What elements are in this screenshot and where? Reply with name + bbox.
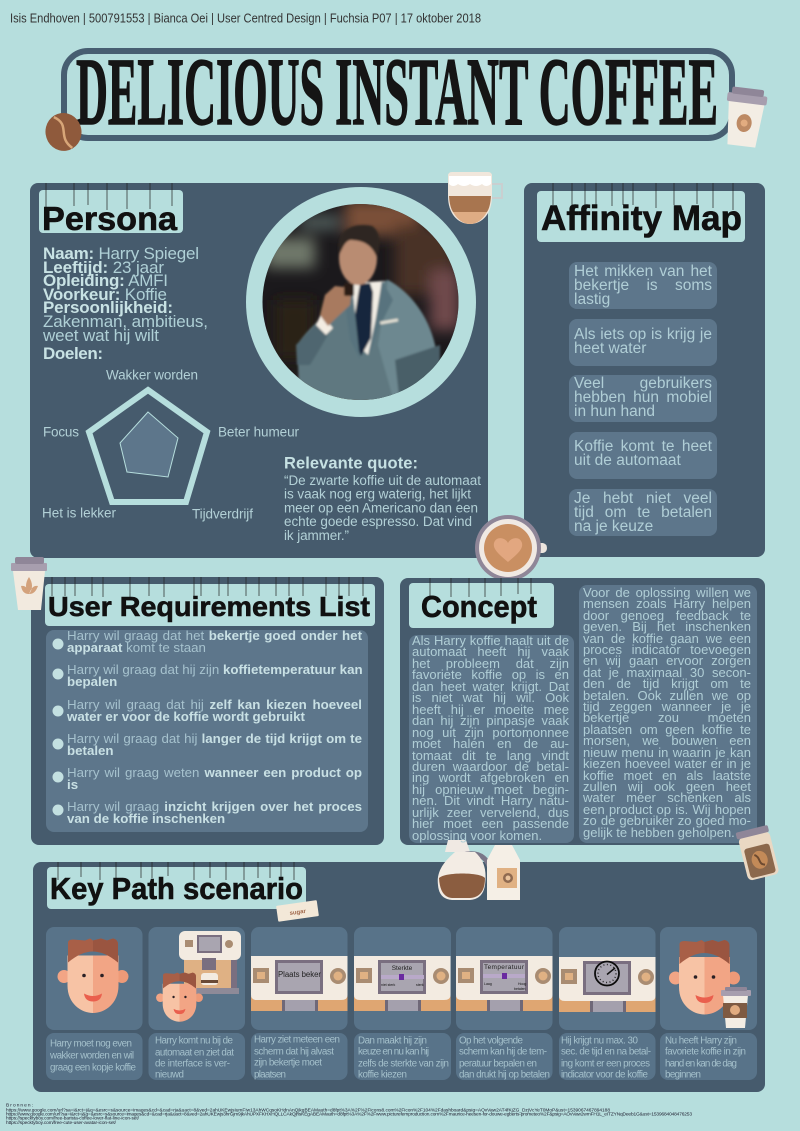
requirement 5: Harry wil graag weten wanneer een product op <box>67 765 362 780</box>
concept text right: den de tijd krijgt om te <box>583 676 751 691</box>
affinity note 4 text: Koffie komt te heet <box>574 438 712 455</box>
concept text right: door genoeg feedback te <box>583 608 751 623</box>
concept text right: een product op is. Wij hopen <box>583 802 751 817</box>
step captions: Harry moet nog even <box>50 1038 132 1050</box>
affinity note 5 text: tijd om te betalen <box>574 504 712 521</box>
concept text left: hier moet een passende <box>412 816 569 831</box>
step 7: harry face with cup <box>669 940 751 1028</box>
concept text right: Voor de oplossing willen we <box>583 585 751 600</box>
step captions: automaat en ziet dat <box>155 1048 234 1058</box>
panel: concept <box>400 578 765 845</box>
affinity note 5 text: Je hebt niet veel <box>574 490 712 507</box>
step captions: zelfs de sterkte van zijn <box>358 1058 449 1070</box>
requirement 3: water er voor de koffie wordt gebruikt <box>67 709 305 724</box>
requirements box <box>46 630 368 832</box>
requirements heading <box>45 577 375 626</box>
concept text right: van de koffie gaan we een <box>583 631 751 646</box>
panel: persona <box>30 183 488 558</box>
persona heading <box>39 183 183 237</box>
step captions: beginnen <box>665 1070 701 1080</box>
affinity note 4 text: uit de automaat <box>574 452 681 469</box>
concept text left: nog uit zijn portomonnee <box>412 725 569 740</box>
concept text left: duren waardoor de betal- <box>412 759 569 774</box>
concept text left: moet halen en de au- <box>412 736 569 751</box>
persona photo <box>246 187 476 417</box>
step captions: hand en kan de dag <box>665 1058 737 1070</box>
concept text left: Als Harry koffie haalt uit de <box>412 633 569 648</box>
concept text left <box>412 633 569 843</box>
radar chart: doelen: Focus <box>43 424 79 440</box>
persona details: Naam: Harry Spiegel <box>43 244 199 263</box>
step captions: wakker worden en wil <box>49 1050 134 1062</box>
step captions <box>49 1034 746 1080</box>
concept text left: het probleem dat zijn <box>412 656 569 671</box>
step captions: Dan maakt hij zijn <box>358 1036 427 1046</box>
requirement 4: betalen <box>67 743 114 758</box>
relevante quote: meer op een Americano dan een <box>284 500 478 516</box>
step captions: sec. de tijd en na betal- <box>561 1046 651 1058</box>
affinity note 3 text: in hun hand <box>574 403 655 420</box>
step captions: ing komt er een proces <box>561 1058 650 1070</box>
sources <box>6 1102 692 1126</box>
affinity notes <box>569 262 717 536</box>
affinity note 2 text: heet water <box>574 340 646 357</box>
requirement 1: Harry wil graag dat het bekertje goed onder het <box>67 628 362 643</box>
requirement 5: is <box>67 777 78 792</box>
relevante quote: is vaak nog erg waterig, het lijkt <box>284 486 471 502</box>
step captions: zijn bekertje moet <box>254 1058 322 1068</box>
step 4: screen sterkte: sterk <box>416 983 424 987</box>
affinity heading <box>537 183 745 242</box>
concept text left: dan heet water krijgt. Dat <box>412 679 569 694</box>
header credit line: Isis Endhoven | 500791553 | Bianca Oei | User Centred Design | Fuchsia P07 | 17 oktober 2018 <box>10 12 481 26</box>
persona details: Leeftijd: 23 jaar <box>43 258 164 277</box>
step 5: screen temperatuur <box>456 956 552 1011</box>
icon: takeaway cup top right <box>721 86 768 148</box>
concept text right: koffie moet en als laatste <box>583 768 751 782</box>
step captions: koffie kiezen <box>358 1070 407 1080</box>
step captions: indicator voor de koffie <box>561 1070 649 1080</box>
title banner <box>64 38 732 145</box>
concept text right: en wij gaan ervoor zorgen <box>583 653 751 668</box>
step 5: screen temperatuur: betalen <box>514 987 526 991</box>
persona details: Doelen: <box>43 344 103 363</box>
concept text left: automaat heeft hij vaak <box>412 644 569 659</box>
icon: takeaway cup with leaf <box>11 557 47 610</box>
step captions: favoriete koffie in zijn <box>665 1046 746 1058</box>
requirement bullets <box>52 638 64 816</box>
icon: coffee jug <box>438 840 492 900</box>
step 5: screen temperatuur: Temperatuur <box>484 964 525 971</box>
requirement 5 <box>67 765 362 792</box>
concept text right: kiezen hoeveel water er in je <box>583 756 751 771</box>
concept text left: nen. Dit vindt Harry natu- <box>412 793 569 808</box>
affinity note 3 text: hebben hun mobiel <box>574 389 712 406</box>
concept text right: zo de gebruiker zo goed mo- <box>583 813 751 828</box>
requirement 4 <box>67 731 362 758</box>
concept text left: ing wordt afgebroken en <box>412 770 569 785</box>
concept text right: bekertje zou moeten <box>583 710 751 725</box>
requirement 3 <box>67 697 362 724</box>
step captions: Op het volgende <box>459 1036 524 1046</box>
panel: user requirements list <box>31 577 384 845</box>
step 2: coffee machine and harry <box>156 931 241 1022</box>
icon: sugar packet <box>276 900 319 922</box>
persona details <box>42 244 208 363</box>
icon: latte glass <box>448 172 502 224</box>
concept text right: proces indicator toevoegen <box>583 642 751 657</box>
step captions: plaatsen <box>254 1070 286 1080</box>
persona details: Voorkeur: Koffie <box>43 285 167 304</box>
step captions: Harry ziet meteen een <box>254 1034 340 1046</box>
concept text left: heeft hij er moeite mee <box>412 702 569 717</box>
affinity note 1 text <box>574 263 712 308</box>
requirement 6 <box>67 799 362 826</box>
affinity note 1 text: bekertje is soms <box>574 277 712 294</box>
radar chart: doelen: Wakker worden <box>106 368 198 382</box>
sources: https://specktyboy.com/free-barista-coffee-lover-flat-line-icon-set/ <box>6 1116 140 1122</box>
step captions: graag een kopje koffie <box>50 1062 137 1074</box>
affinity note 3 text <box>574 375 712 420</box>
icon: sugar packet: sugar <box>289 909 307 917</box>
panel: key path scenario <box>33 862 765 1092</box>
step image cards <box>46 927 757 1030</box>
step captions: keuze en nu kan hij <box>358 1046 429 1058</box>
step captions: nieuwd <box>155 1070 184 1080</box>
icon: coffee bean <box>43 111 84 153</box>
requirement 2: Harry wil graag dat hij zijn koffietemperatuur kan <box>67 662 363 677</box>
icon: coffee jar <box>735 825 780 881</box>
step 3: screen plaats beker: Plaats beker <box>278 970 321 979</box>
concept text right: morsen, we bouwen een <box>583 733 751 748</box>
radar chart: doelen <box>42 368 300 522</box>
persona details: Zakenman, ambitieus, <box>43 312 208 331</box>
radar chart: doelen: Het is lekker <box>42 506 116 520</box>
concept text right: dat je maximaal 30 secon- <box>583 665 751 680</box>
step 5: screen temperatuur: Hoog <box>518 982 526 986</box>
concept text left: dan hij zijn pinpasje vaak <box>412 713 569 728</box>
step captions: scherm dat hij alvast <box>254 1046 334 1058</box>
step captions: Nu heeft Harry zijn <box>665 1036 737 1046</box>
affinity note 5 text <box>574 490 712 535</box>
affinity note 1 text: lastig <box>574 291 610 308</box>
step 4: screen sterkte <box>354 956 450 1011</box>
step captions: dan drukt hij op betalen <box>459 1070 550 1080</box>
sources: https://www.google.com/url?sa=i&rct=j&q=&esrc=s&source=images&cd=&cad=rja&uact=8&ved=2ahUKEwjs3hrGjm9jkAhUPXFKHXHQLLCAkQjhsKEgABEAMauth=d8fpt%3A%2F%2Fwww.picturefernproduction.com%2Fmaurice-heesen-for-douwe-egberts-prometeo%2F&psig=AOvVaw2wmFH1L_eITZYNqDeeb1G&ust=1539684048476253 <box>6 1112 692 1118</box>
requirement 4: Harry wil graag dat hij langer de tijd krijgt om te <box>67 731 362 746</box>
requirement 1: apparaat komt te staan <box>67 640 206 655</box>
step 3: screen plaats beker <box>251 956 348 1011</box>
affinity note 4 text <box>574 438 712 469</box>
affinity note 2 text <box>574 326 712 357</box>
requirement 2: bepalen <box>67 674 117 689</box>
persona details: Persoonlijkheid: <box>43 298 173 317</box>
concept text right: geven. Bij het inschenken <box>583 619 751 634</box>
relevante quote <box>284 454 481 543</box>
concept text left: is niet wat hij wil. Ook <box>412 690 569 705</box>
requirement 6: van de koffie inschenken <box>67 811 225 826</box>
step 6: screen gauge <box>559 957 656 1012</box>
affinity note 5 text: na je keuze <box>574 518 653 535</box>
step 5: screen temperatuur: Laag <box>484 982 492 986</box>
concept text right: tijd zeggen wanneer je je <box>583 699 751 714</box>
step captions: scherm kan hij de tem- <box>459 1046 547 1058</box>
concept text boxes <box>409 585 757 843</box>
step caption cards <box>46 1033 757 1080</box>
relevante quote: ik jammer.” <box>284 528 349 543</box>
radar chart: doelen: Tijdverdrijf <box>192 506 253 522</box>
requirements heading: User Requirements List <box>48 591 370 622</box>
concept text right <box>583 585 751 840</box>
requirement 1 <box>67 628 362 655</box>
concept heading: Concept <box>421 589 537 624</box>
step captions: de interface is ver- <box>155 1058 230 1070</box>
concept text left: tomaat dit te lang vindt <box>412 748 569 763</box>
sources: https://www.google.com/url?sa=i&rct=j&q=&esrc=s&source=images&cd=&cad=rja&uact=8&ved=2ahUKEwjsIumFIw13AhWCqsoKHdnAnQjkgBEAMauth=d8fpt%3A%2F%2Ficons8.com%2Ficon%2F104%2Fdashboard&psig=AOvVaw2AT4fKjZG_DzjVcYeT0MoP&ust=1539067467894188 <box>6 1108 610 1114</box>
step captions: Harry komt nu bij de <box>155 1036 234 1046</box>
persona heading: Persona <box>42 200 178 237</box>
persona details: Opleiding: AMFI <box>43 271 168 290</box>
relevante quote: “De zwarte koffie uit de automaat <box>284 473 481 488</box>
icon: coffee cup from above <box>475 515 547 581</box>
concept text right: mensen zoals Harry helpen <box>583 596 751 611</box>
requirement 3: Harry wil graag dat hij zelf kan kiezen hoeveel <box>67 697 362 712</box>
sources: https://specktyboy.com/free-cute-user-avatar-icon-set/ <box>6 1120 117 1126</box>
panel: affinity map <box>524 183 765 557</box>
sources: Bronnen: <box>6 1102 33 1108</box>
step 4: screen sterkte: Sterkte <box>392 965 413 972</box>
concept text right: nieuw menu in waarin je kan <box>583 745 751 760</box>
step 4: screen sterkte: niet sterk <box>381 983 395 987</box>
affinity note 2 text: Als iets op is krijg je <box>574 326 712 343</box>
concept text right: plaatsen om geen koffie te <box>583 722 751 737</box>
concept text left: favoriete koffie op is en <box>412 667 569 682</box>
concept text right: gelijk te hebben geholpen. <box>583 825 735 840</box>
affinity heading: Affinity Map <box>541 199 742 238</box>
key path heading: Key Path scenario <box>50 871 303 906</box>
concept heading <box>409 578 554 628</box>
affinity note 1 text: Het mikken van het <box>574 263 712 280</box>
concept text left: urlijk zeer vervelend, dus <box>412 805 569 820</box>
concept text right: water meer schenken als <box>583 790 751 805</box>
icon: milk carton <box>487 845 520 900</box>
concept text left: oplossing voor komen. <box>412 828 542 843</box>
step captions: peratuur bepalen en <box>459 1058 537 1070</box>
step captions: Hij krijgt nu max. 30 <box>561 1036 639 1046</box>
relevante quote: echte goede espresso. Dat vind <box>284 514 472 529</box>
radar chart: doelen: Beter humeur <box>218 424 300 440</box>
relevante quote: Relevante quote: <box>284 454 418 472</box>
concept text left: hij opnieuw moet begin- <box>412 782 569 797</box>
requirement 6: Harry wil graag inzicht krijgen over het proces <box>67 799 362 814</box>
persona details: weet wat hij wilt <box>42 326 159 345</box>
affinity note 3 text: Veel gebruikers <box>574 375 712 392</box>
concept text right: betalen. Ook zullen we op <box>583 688 751 703</box>
step 1: harry face <box>58 938 128 1013</box>
concept text right: zullen wij ook geen heet <box>583 779 751 794</box>
requirement 2 <box>67 662 363 689</box>
